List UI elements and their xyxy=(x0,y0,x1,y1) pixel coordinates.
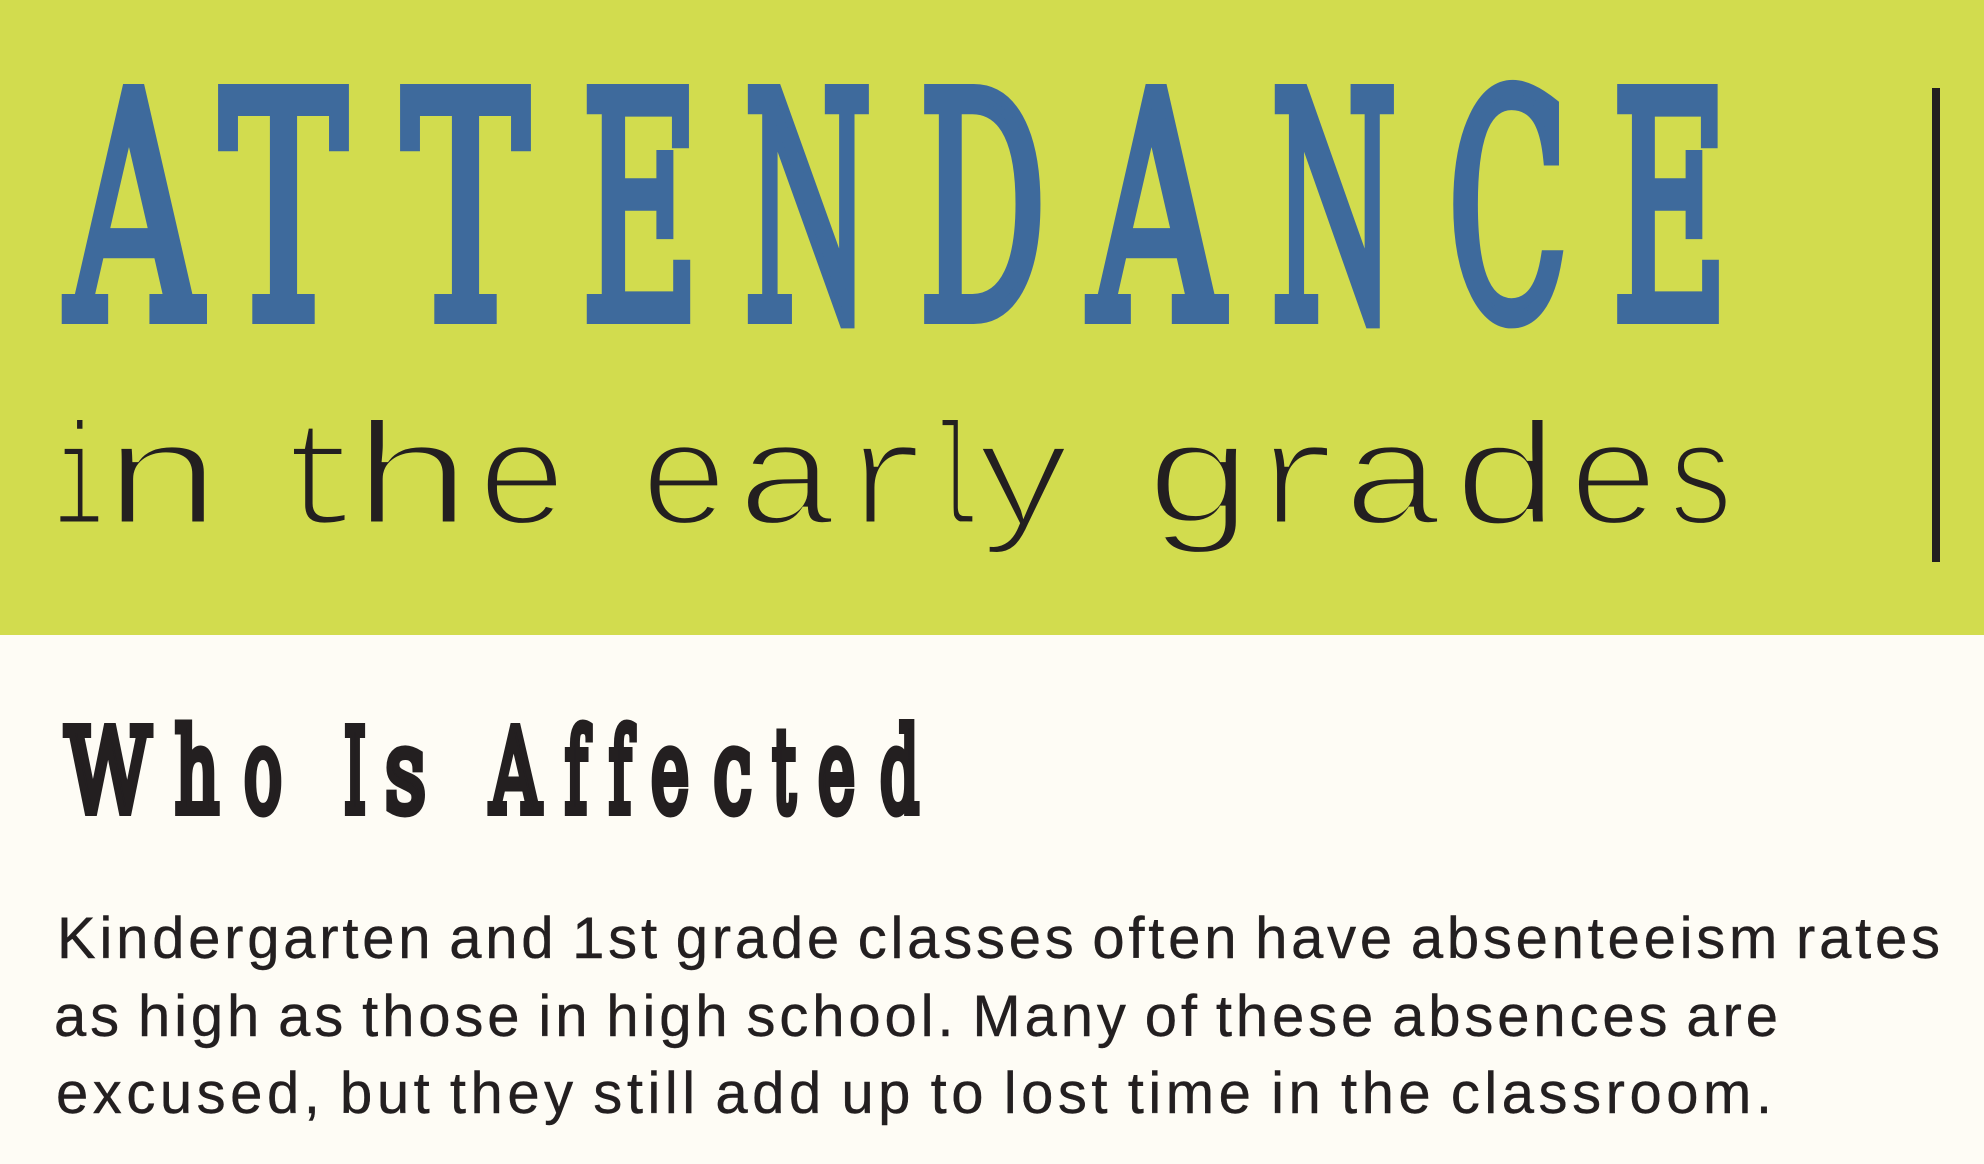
heading: Who Is Affected: f xyxy=(609,706,635,840)
subtitle: in the early grades: a xyxy=(734,403,840,569)
title: ATTENDANCE: D xyxy=(919,30,1046,391)
title: ATTENDANCE: T xyxy=(220,30,347,391)
title: ATTENDANCE: A xyxy=(64,30,203,391)
subtitle: in the early grades xyxy=(53,403,1738,569)
title: ATTENDANCE: N xyxy=(1271,30,1397,391)
heading: Who Is Affected: s xyxy=(385,706,426,840)
heading: Who Is Affected: e xyxy=(818,706,855,840)
subtitle: in the early grades: d xyxy=(1449,403,1563,569)
title: ATTENDANCE: E xyxy=(1612,30,1728,391)
body text paragraph xyxy=(54,906,1940,1126)
title: ATTENDANCE: N xyxy=(744,30,872,391)
heading: Who Is Affected: h xyxy=(175,706,219,840)
body text paragraph: excused, but they still add up to lost time in the classroom. xyxy=(56,1061,1772,1126)
heading: Who Is Affected: f xyxy=(565,706,591,840)
heading: Who Is Affected: c xyxy=(714,706,752,840)
subtitle: in the early grades: l xyxy=(931,403,978,569)
subtitle: in the early grades: g xyxy=(1141,403,1256,569)
vertical divider bar xyxy=(1932,88,1940,562)
panel: lime green title banner xyxy=(0,0,1984,635)
subtitle: in the early grades: i xyxy=(53,403,104,569)
heading: Who Is Affected: o xyxy=(244,706,282,840)
subtitle: in the early grades: h xyxy=(348,403,477,569)
subtitle: in the early grades: e xyxy=(1566,403,1661,569)
subtitle: in the early grades: e xyxy=(475,403,569,569)
heading: Who Is Affected: I xyxy=(344,706,366,840)
heading: Who Is Affected: e xyxy=(651,706,689,840)
subtitle: in the early grades: y xyxy=(973,403,1074,569)
heading: Who Is Affected: W xyxy=(66,706,150,840)
body text paragraph: Kindergarten and 1st grade classes often have absenteeism rates xyxy=(57,906,1940,971)
subtitle: in the early grades: r xyxy=(843,403,931,569)
subtitle: in the early grades: a xyxy=(1340,403,1446,569)
title: ATTENDANCE: A xyxy=(1087,30,1225,391)
heading: Who Is Affected: t xyxy=(772,706,796,840)
heading: Who Is Affected: A xyxy=(490,706,542,840)
title: ATTENDANCE: C xyxy=(1448,30,1568,391)
body text paragraph: as high as those in high school. Many of these absences are xyxy=(54,984,1778,1049)
heading: Who Is Affected xyxy=(66,706,919,840)
subtitle: in the early grades: t xyxy=(279,403,361,569)
subtitle: in the early grades: s xyxy=(1663,403,1738,569)
title: ATTENDANCE: E xyxy=(582,30,700,391)
heading: Who Is Affected: d xyxy=(880,706,919,840)
title: ATTENDANCE xyxy=(64,30,1728,391)
subtitle: in the early grades: e xyxy=(638,403,730,569)
title: ATTENDANCE: T xyxy=(402,30,529,391)
subtitle: in the early grades: n xyxy=(99,403,226,569)
subtitle: in the early grades: r xyxy=(1253,403,1343,569)
